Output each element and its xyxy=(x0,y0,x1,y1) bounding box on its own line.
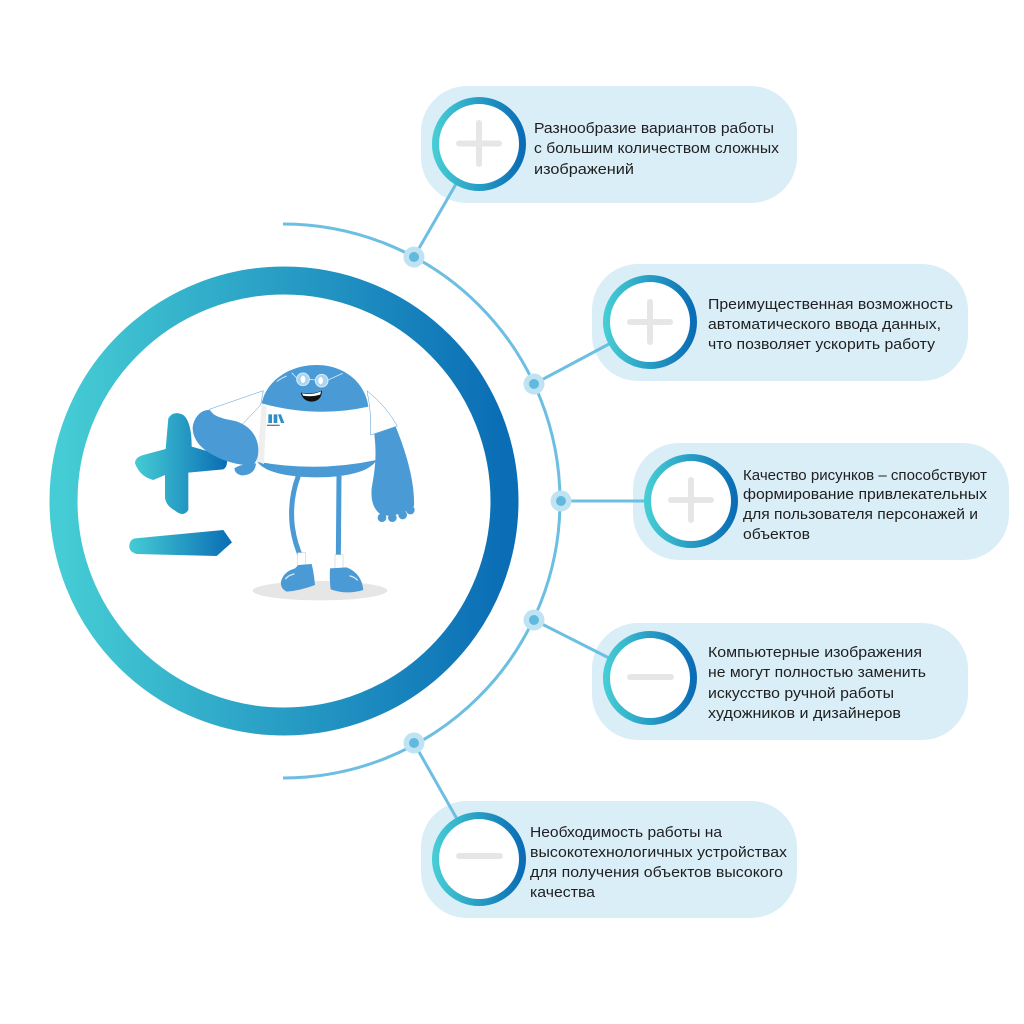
plus badge 1 xyxy=(436,100,522,188)
text block xyxy=(530,825,788,901)
connectors and nodes xyxy=(404,184,645,819)
text block: Необходимость работы на xyxy=(530,825,723,841)
text block: что позволяет ускорить работу xyxy=(708,337,936,353)
text block: с большим количеством сложных xyxy=(534,141,780,157)
text block: объектов xyxy=(743,527,810,543)
text block: искусство ручной работы xyxy=(708,686,894,702)
text block: Качество рисунков – способствуют xyxy=(743,468,987,484)
text block: художников и дизайнеров xyxy=(708,706,901,722)
panel background xyxy=(421,801,797,918)
text block: Разнообразие вариантов работы xyxy=(534,121,774,137)
panel background xyxy=(592,623,968,740)
text block: автоматического ввода данных, xyxy=(708,317,941,333)
text block: Преимущественная возможность xyxy=(708,297,953,313)
big gradient ring xyxy=(64,280,504,722)
panel background xyxy=(421,86,797,203)
text block: не могут полностью заменить xyxy=(708,665,926,681)
panel: minus 1 xyxy=(592,623,968,740)
text block: для получения объектов высокого xyxy=(530,865,783,881)
text block xyxy=(743,468,988,543)
text block xyxy=(708,297,953,353)
text block: Компьютерные изображения xyxy=(708,645,922,661)
panel: minus 2 xyxy=(421,801,797,918)
icon: large minus xyxy=(129,530,232,556)
panel: plus 3 xyxy=(633,443,1009,560)
panel: plus 1 xyxy=(421,86,797,203)
plus badge 3 xyxy=(648,458,734,544)
minus badge 2 xyxy=(436,816,522,902)
text block: высокотехнологичных устройствах xyxy=(530,845,788,861)
text block: для пользователя персонажей и xyxy=(743,507,978,523)
panel: plus 2 xyxy=(592,264,968,381)
text block: изображений xyxy=(534,162,634,178)
outer arc xyxy=(283,224,560,778)
icon: large plus xyxy=(135,413,227,514)
panel background xyxy=(633,443,1009,560)
text block xyxy=(534,121,780,178)
mascot xyxy=(193,365,415,600)
text block: качества xyxy=(530,885,596,901)
text block xyxy=(708,645,926,722)
plus badge 2 xyxy=(606,278,694,366)
text block: формирование привлекательных xyxy=(743,487,988,503)
illustration: plus, minus and mascot xyxy=(129,365,415,600)
panel background xyxy=(592,264,968,381)
minus badge 1 xyxy=(606,634,694,722)
